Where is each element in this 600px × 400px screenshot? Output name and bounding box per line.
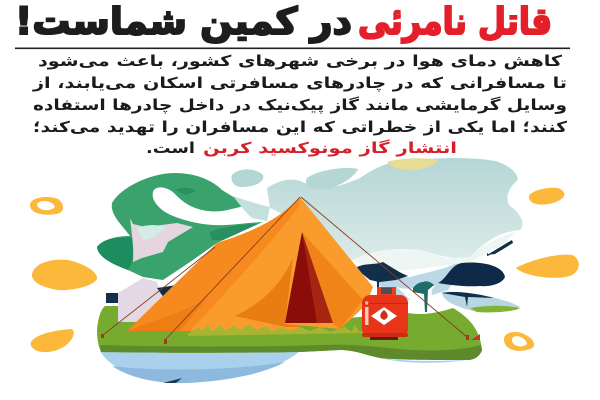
- yellow blob: right bottom ring: [504, 332, 534, 351]
- title: [15, 0, 552, 43]
- illustration: camping scene: [30, 158, 579, 383]
- body paragraph: [32, 52, 567, 157]
- title: قاتل نامرئی: [358, 0, 552, 43]
- grass tufts: [188, 324, 418, 336]
- body paragraph: تا مسافرانی که در چادرهای مسافرتی اسکان می‌یابند، از: [32, 74, 567, 93]
- yellow blob: right top: [529, 188, 564, 205]
- distant dark shapes: [106, 293, 118, 303]
- guy ropes and pegs: [103, 197, 467, 340]
- title: در کمین شماست!: [15, 0, 352, 43]
- cloud blobs: [231, 169, 263, 187]
- tree foliage: [97, 173, 267, 280]
- yellow blob: left middle: [32, 260, 97, 290]
- water: [100, 351, 300, 383]
- upper tree trunk: [130, 218, 193, 262]
- body paragraph: انتشار گاز مونوکسید کربن: [203, 139, 457, 157]
- sun: [387, 158, 438, 170]
- body paragraph: کنند؛ اما یکی از خطراتی که این مسافران را تهدید می‌کند؛: [33, 118, 567, 136]
- yellow blob: right middle: [516, 255, 579, 278]
- white swirl in foliage: [153, 187, 270, 225]
- yellow blob: left bottom: [31, 329, 74, 352]
- sky: [267, 158, 522, 262]
- body paragraph: است.: [146, 139, 195, 157]
- meadow: [97, 306, 482, 360]
- distant landscape right: [355, 257, 470, 300]
- body paragraph: کاهش دمای هوا در برخی شهرهای کشور، باعث می‌شود: [38, 52, 562, 70]
- body paragraph: وسایل گرمایشی مانند گاز پیک‌نیک در داخل چادرها استفاده: [33, 96, 567, 115]
- icon: red gas cylinder: [362, 287, 408, 340]
- tent: [127, 197, 373, 331]
- yellow blob: left top ring: [30, 197, 63, 215]
- tree trunk: [118, 278, 163, 322]
